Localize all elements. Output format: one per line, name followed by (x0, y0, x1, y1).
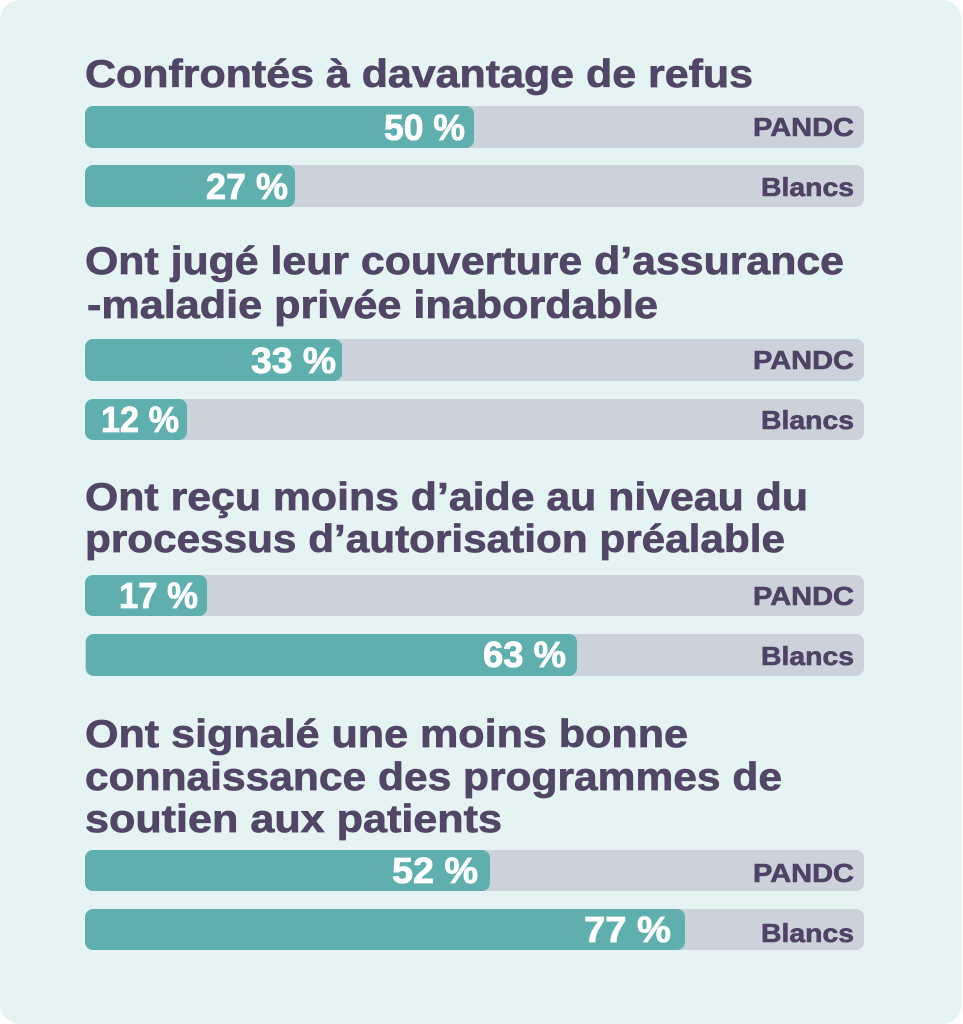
bar: prior authorization Blancs 63 % (85, 634, 864, 676)
heading: refusals: Confrontés à davantage de refus (85, 53, 753, 96)
bar: refusals PANDC 50 %: 50 % (384, 107, 465, 148)
heading: affordability: -maladie privée inabordable (87, 284, 658, 327)
bar: refusals PANDC 50 % (85, 106, 864, 148)
bar: patient support Blancs 77 % (85, 909, 864, 950)
bar: affordability PANDC 33 %: PANDC (753, 345, 854, 375)
bar: patient support Blancs 77 %: Blancs (761, 918, 854, 948)
bar: affordability PANDC 33 % (85, 339, 864, 381)
bar: affordability PANDC 33 %: 33 % (251, 340, 336, 381)
bar: patient support PANDC 52 % (85, 850, 864, 891)
bar: affordability Blancs 12 %: 12 % (101, 399, 179, 440)
bar: refusals PANDC 50 %: PANDC (753, 112, 854, 142)
bar: prior authorization PANDC 17 %: 17 % (119, 575, 198, 616)
section: prior authorization (85, 476, 864, 676)
bar: affordability Blancs 12 % (85, 399, 864, 440)
bar: prior authorization Blancs 63 %: 63 % (483, 634, 566, 675)
bar: refusals Blancs 27 %: 27 % (206, 166, 288, 207)
bar: refusals Blancs 27 % (85, 165, 864, 207)
bar: prior authorization Blancs 63 %: Blancs (761, 641, 854, 671)
bar: affordability Blancs 12 %: Blancs (761, 405, 854, 435)
bar: prior authorization PANDC 17 %: PANDC (753, 581, 854, 611)
bar: patient support Blancs 77 %: 77 % (584, 909, 671, 950)
heading: prior authorization: Ont reçu moins d’aide au niveau du (85, 476, 808, 519)
bar: refusals Blancs 27 %: Blancs (761, 172, 854, 202)
heading: patient support programs: Ont signalé une moins bonne (85, 713, 688, 756)
heading: patient support programs: soutien aux patients (85, 798, 502, 841)
bar: patient support PANDC 52 %: PANDC (753, 858, 854, 888)
heading: patient support programs: connaissance des programmes de (85, 756, 782, 799)
bar: patient support PANDC 52 %: 52 % (392, 850, 478, 891)
heading: prior authorization (85, 476, 808, 561)
heading: prior authorization: processus d’autorisation préalable (85, 518, 785, 561)
heading: patient support programs (85, 713, 782, 841)
section: refusals (85, 53, 864, 207)
heading: affordability (85, 240, 844, 327)
section: patient support programs (85, 713, 864, 950)
section: affordability (85, 240, 864, 440)
heading: affordability: Ont jugé leur couverture d’assurance (85, 240, 844, 283)
bar: prior authorization PANDC 17 % (85, 575, 864, 616)
